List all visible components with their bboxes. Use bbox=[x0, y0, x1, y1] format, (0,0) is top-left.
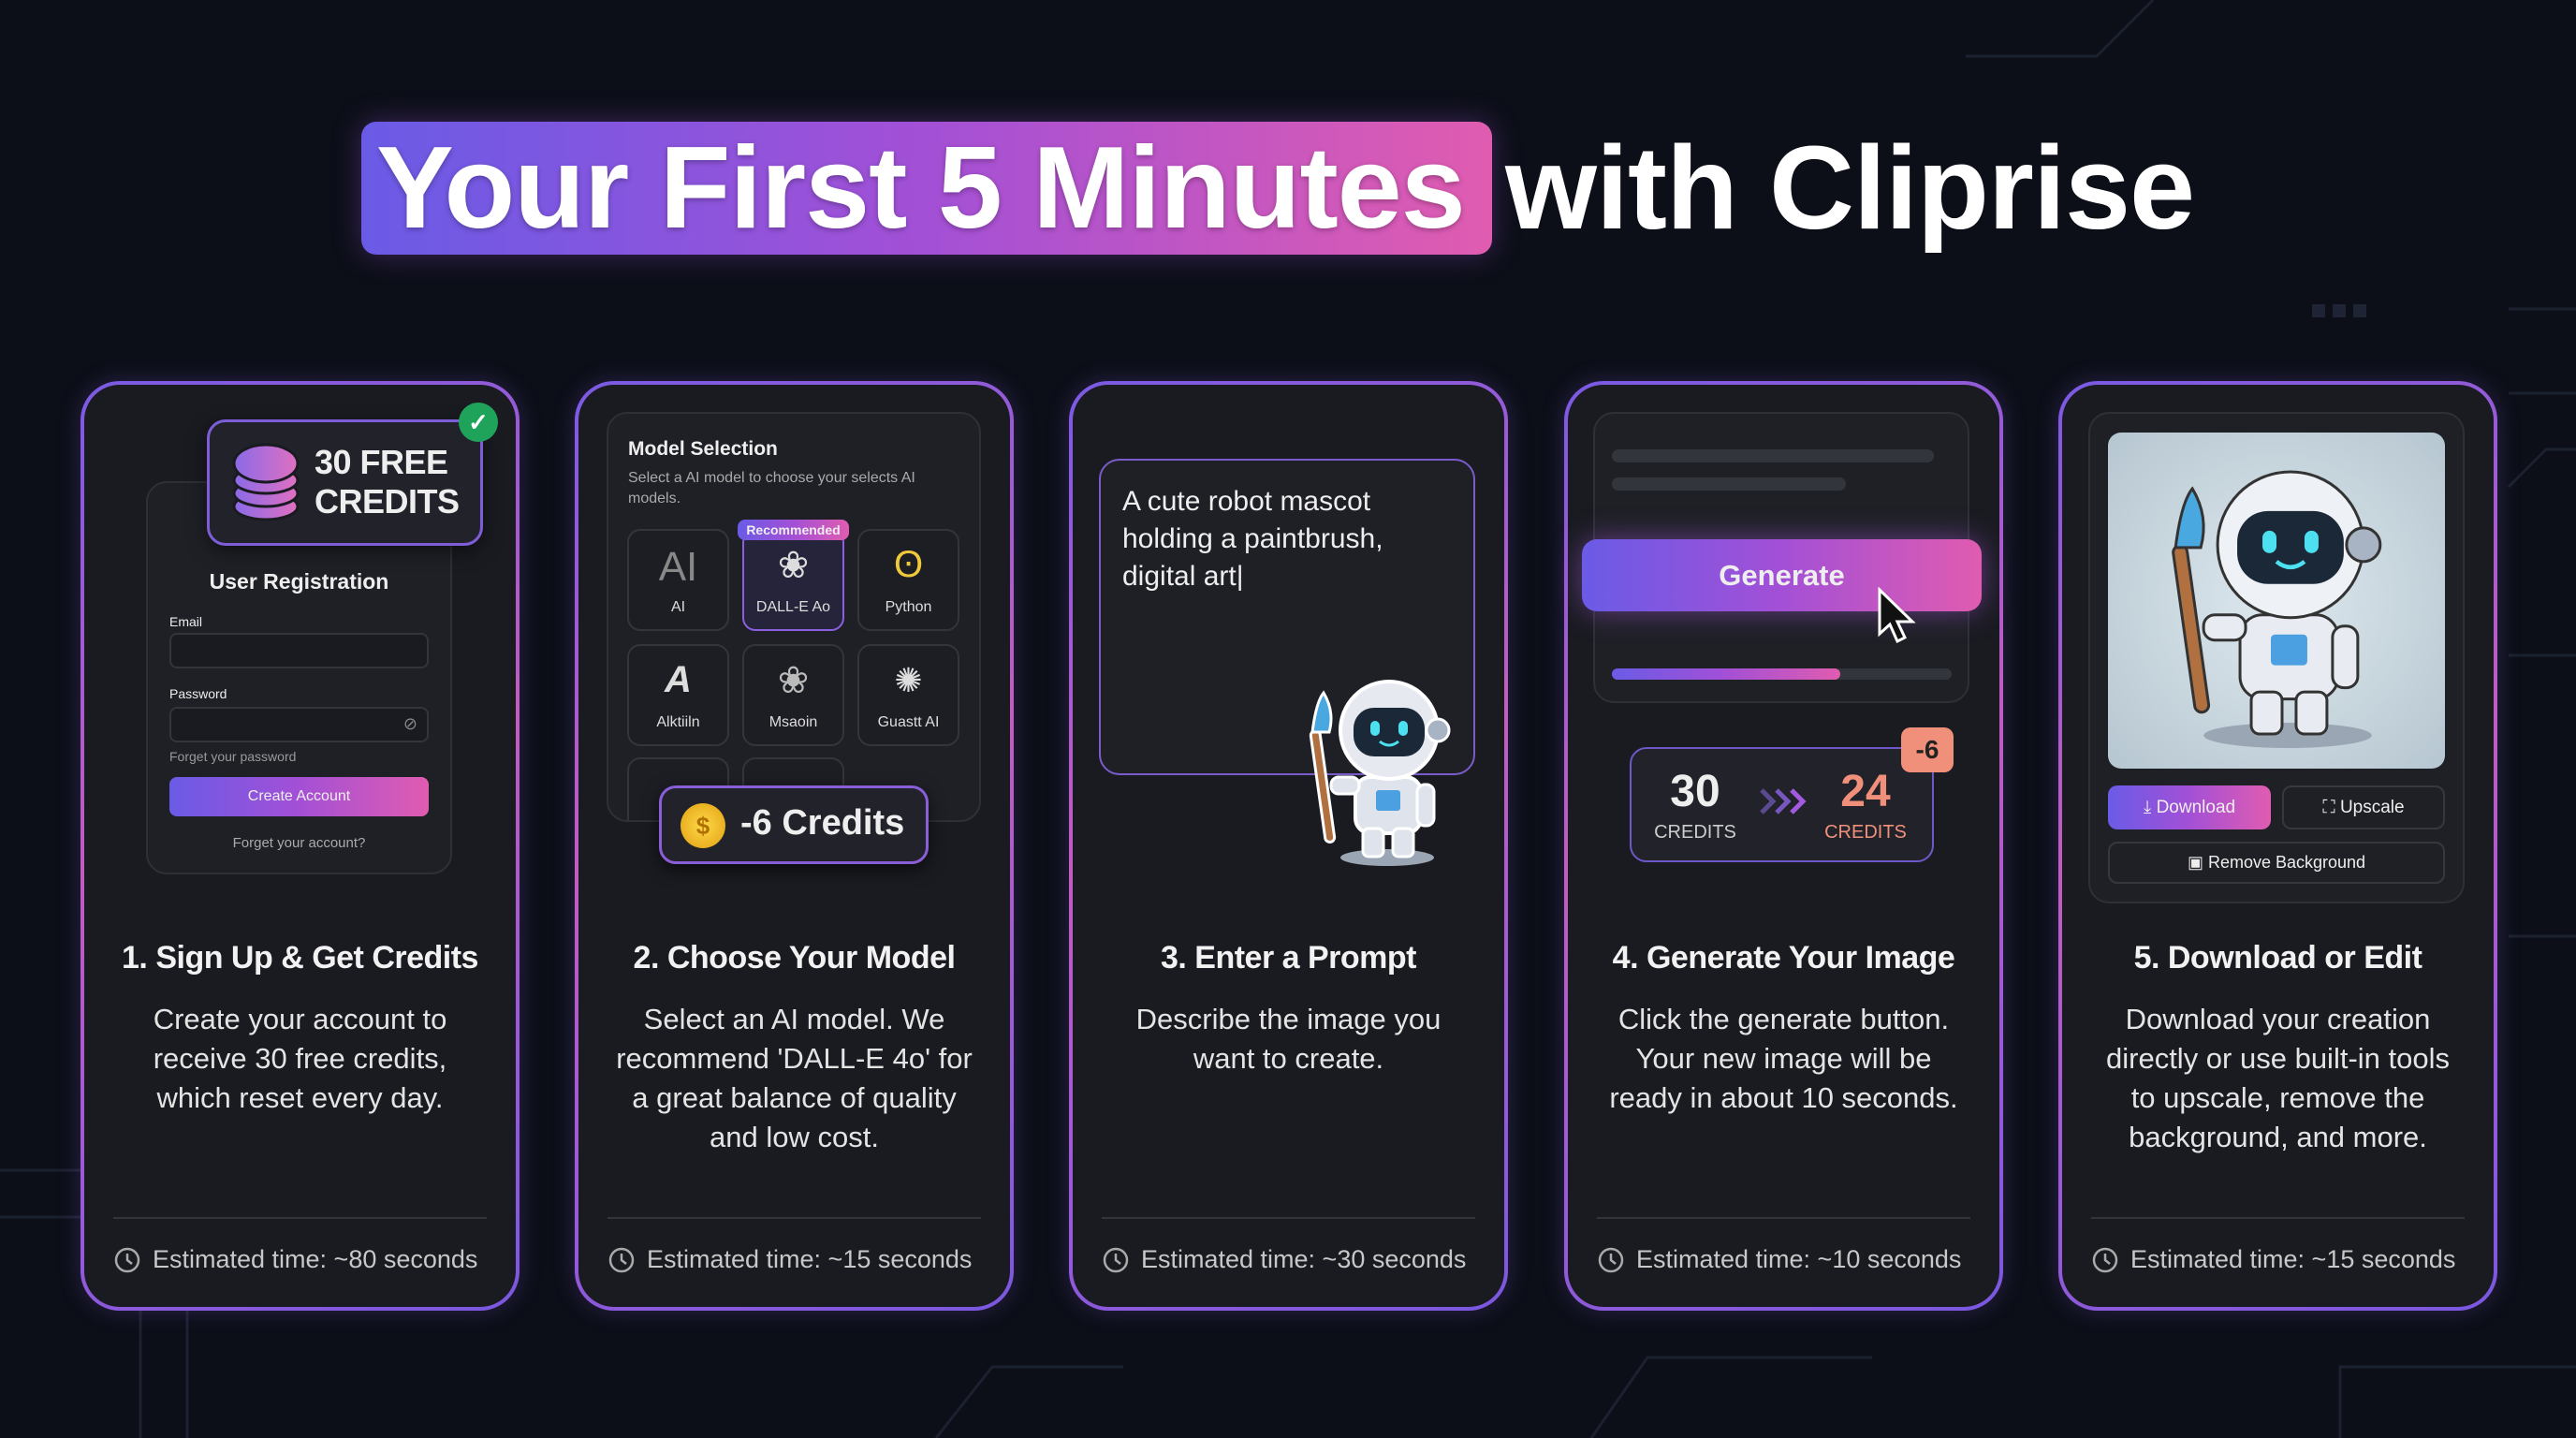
description: want to create. bbox=[1193, 1042, 1383, 1075]
description: receive 30 free credits, bbox=[154, 1042, 446, 1075]
description: Download your creation bbox=[2126, 1003, 2430, 1035]
credits change box bbox=[1630, 747, 1934, 862]
free credits badge bbox=[207, 419, 483, 546]
panel: step 5 bbox=[2058, 381, 2497, 1311]
title highlight pill bbox=[361, 122, 1492, 255]
model selection mockup: Model Selection bbox=[628, 438, 778, 460]
arrow chevrons bbox=[1760, 788, 1807, 814]
step title: 2. Choose Your Model bbox=[634, 940, 955, 976]
minus badge bbox=[1901, 727, 1954, 772]
icon: check: ✓ bbox=[468, 408, 489, 436]
upscale button: ⛶ Upscale bbox=[2322, 798, 2405, 817]
estimated time: Estimated time: ~15 seconds bbox=[647, 1245, 972, 1273]
description bbox=[1609, 1003, 1958, 1114]
title: Your First 5 Minutes bbox=[376, 124, 1465, 253]
model selection mockup: ❀ bbox=[778, 545, 809, 586]
download button bbox=[2108, 785, 2271, 829]
generate mockup bbox=[1593, 412, 1969, 703]
icon: check bbox=[459, 403, 498, 442]
title: with Cliprise bbox=[1505, 122, 2194, 254]
result mockup bbox=[2088, 412, 2465, 903]
model selection mockup: Select a AI model to choose your selects AI models. bbox=[628, 470, 915, 506]
description bbox=[1136, 1003, 1441, 1075]
description: Click the generate button. bbox=[1618, 1003, 1949, 1035]
prompt box: A cute robot mascot bbox=[1122, 486, 1370, 517]
description: Create your account to bbox=[154, 1003, 446, 1035]
model selection mockup: A bbox=[665, 659, 692, 700]
credits cost pill bbox=[659, 785, 929, 864]
estimated time: Estimated time: ~80 seconds bbox=[153, 1245, 477, 1273]
free credits badge: 30 FREE bbox=[315, 443, 448, 481]
registration form mockup: ⊘ bbox=[403, 714, 417, 733]
description: directly or use built-in tools bbox=[2106, 1042, 2450, 1075]
prompt box bbox=[1099, 459, 1475, 775]
model selection mockup: DALL-E Ao bbox=[756, 599, 830, 615]
generated image bbox=[2108, 433, 2445, 769]
registration form mockup: Email bbox=[169, 614, 202, 629]
upscale button bbox=[2282, 785, 2445, 829]
registration form mockup: Forget your account? bbox=[233, 835, 365, 851]
icon: cursor bbox=[1878, 587, 1916, 643]
estimated time: Estimated time: ~10 seconds bbox=[1636, 1245, 1961, 1273]
estimated time: Estimated time: ~30 seconds bbox=[1141, 1245, 1466, 1273]
description bbox=[154, 1003, 446, 1114]
prompt box: holding a paintbrush, bbox=[1122, 523, 1383, 554]
model selection mockup: ❀ bbox=[778, 660, 809, 701]
model selection mockup: AI bbox=[671, 599, 685, 615]
description: a great balance of quality bbox=[632, 1081, 957, 1114]
description: ready in about 10 seconds. bbox=[1609, 1081, 1958, 1114]
prompt box: digital art| bbox=[1122, 561, 1244, 592]
credits cost pill: $ bbox=[696, 812, 710, 840]
registration form mockup: Password bbox=[169, 686, 227, 701]
download button: ⤓ Download bbox=[2144, 798, 2235, 817]
panel: step 2 bbox=[575, 381, 1014, 1311]
credits change box: CREDITS bbox=[1654, 822, 1736, 843]
description: Describe the image you bbox=[1136, 1003, 1441, 1035]
description: Your new image will be bbox=[1636, 1042, 1931, 1075]
description: and low cost. bbox=[710, 1121, 879, 1153]
step title: 5. Download or Edit bbox=[2134, 940, 2422, 976]
icon: coin stack bbox=[232, 444, 300, 521]
minus badge: -6 bbox=[1916, 735, 1939, 764]
recommended tag bbox=[738, 520, 849, 540]
description: recommend 'DALL-E 4o' for bbox=[616, 1042, 973, 1075]
registration form mockup: User Registration bbox=[210, 569, 388, 594]
free credits badge: CREDITS bbox=[315, 482, 460, 521]
description: background, and more. bbox=[2129, 1121, 2427, 1153]
title bbox=[346, 107, 2194, 270]
panel: step 3 bbox=[1069, 381, 1508, 1311]
description bbox=[2106, 1003, 2450, 1153]
model selection mockup: Msaoin bbox=[769, 714, 817, 730]
credits change box: CREDITS bbox=[1824, 822, 1907, 843]
generate button: Generate bbox=[1719, 559, 1845, 592]
panel: step 1 bbox=[80, 381, 520, 1311]
step title: 3. Enter a Prompt bbox=[1161, 940, 1416, 976]
panel: step 4 bbox=[1564, 381, 2003, 1311]
remove background button: ▣ Remove Background bbox=[2188, 853, 2365, 872]
step title: 1. Sign Up & Get Credits bbox=[122, 940, 478, 976]
credits change box: 24 bbox=[1840, 767, 1891, 816]
model selection mockup: AI bbox=[659, 544, 697, 590]
model selection mockup: Guastt AI bbox=[878, 714, 939, 730]
model selection mockup: Alktiiln bbox=[656, 714, 700, 730]
recommended tag: Recommended bbox=[746, 522, 841, 537]
icon: robot mascot bbox=[1309, 680, 1451, 866]
remove background button bbox=[2108, 842, 2445, 884]
credits change box: 30 bbox=[1670, 767, 1720, 816]
model selection mockup: ✺ bbox=[894, 661, 923, 699]
registration form mockup: Create Account bbox=[248, 788, 350, 804]
description bbox=[616, 1003, 973, 1153]
step title: 4. Generate Your Image bbox=[1613, 940, 1954, 976]
registration form mockup bbox=[146, 481, 452, 874]
description: which reset every day. bbox=[156, 1081, 444, 1114]
description: to upscale, remove the bbox=[2131, 1081, 2424, 1114]
model selection mockup: Python bbox=[886, 599, 931, 615]
credits cost pill: -6 Credits bbox=[740, 803, 904, 843]
estimated time: Estimated time: ~15 seconds bbox=[2130, 1245, 2455, 1273]
generate button bbox=[1582, 539, 1982, 611]
model selection mockup: ʘ bbox=[894, 544, 923, 585]
description: Select an AI model. We bbox=[644, 1003, 944, 1035]
registration form mockup: Forget your password bbox=[169, 749, 296, 764]
model selection mockup bbox=[607, 412, 981, 822]
